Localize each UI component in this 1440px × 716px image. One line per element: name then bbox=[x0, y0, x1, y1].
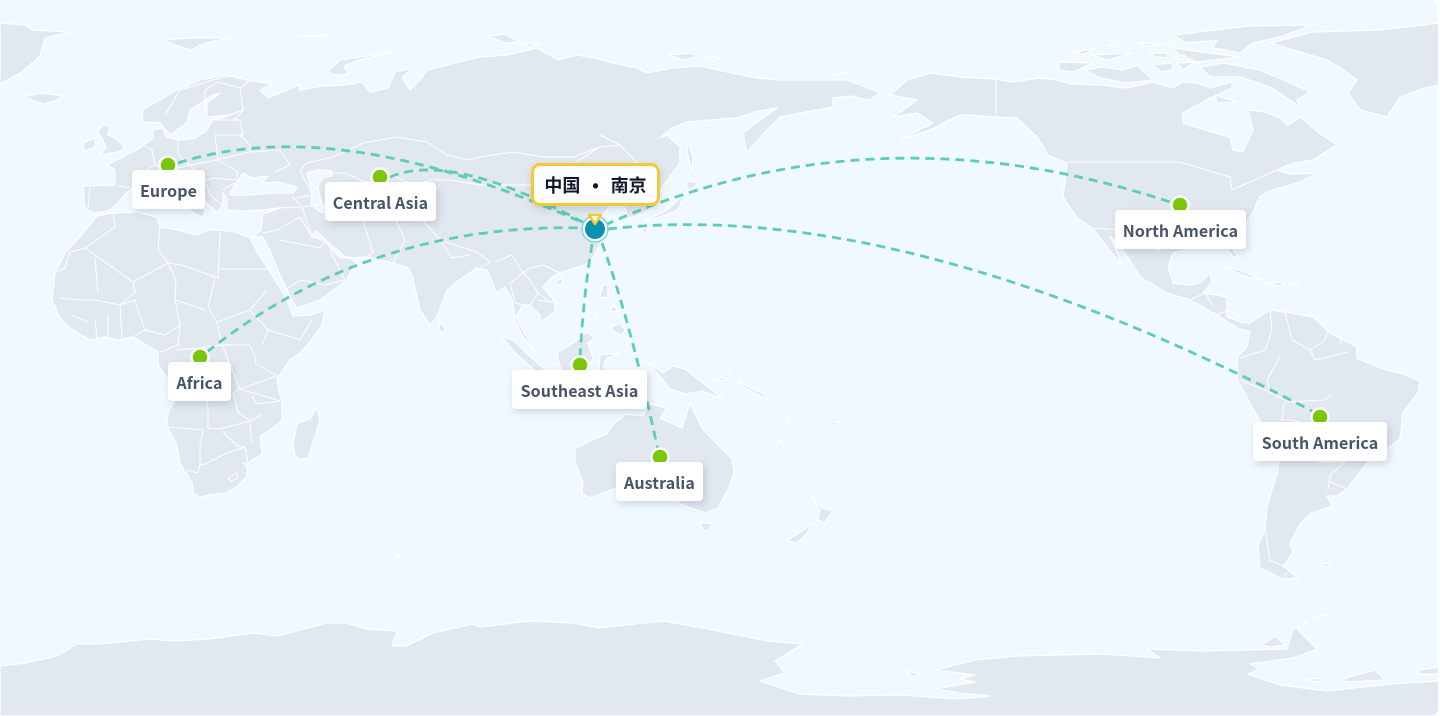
label: South America: South America bbox=[1262, 430, 1378, 454]
marker: South America bbox=[1312, 408, 1328, 426]
label: South America bbox=[1253, 422, 1387, 461]
marker: Europe bbox=[160, 156, 176, 174]
New Zealand bbox=[787, 496, 833, 543]
callout: origin city: 中国 • 南京 bbox=[544, 176, 647, 196]
New Guinea bbox=[647, 361, 723, 399]
label: Europe: Europe bbox=[140, 178, 197, 202]
route: Africa bbox=[207, 228, 585, 352]
Sri Lanka bbox=[439, 322, 445, 333]
label: Australia: Australia bbox=[624, 470, 695, 494]
Caspian Sea bbox=[307, 170, 332, 214]
label: Southeast Asia bbox=[512, 370, 647, 409]
callout: origin city bbox=[531, 163, 660, 206]
Japan bbox=[642, 142, 700, 235]
route: North America bbox=[605, 158, 1170, 225]
destination markers bbox=[160, 156, 1328, 466]
Southeast Asia islands bbox=[502, 258, 625, 405]
label: North America bbox=[1115, 210, 1246, 249]
marker: Australia bbox=[652, 448, 668, 466]
Madagascar bbox=[293, 407, 320, 459]
label: Southeast Asia: Southeast Asia bbox=[521, 378, 638, 402]
Canadian Arctic islands bbox=[1058, 25, 1312, 107]
marker: Africa bbox=[192, 348, 208, 366]
label: Australia bbox=[616, 462, 703, 501]
route: Southeast Asia bbox=[580, 244, 592, 358]
Great Britain bbox=[97, 125, 125, 155]
Alaska and North America bbox=[890, 73, 1420, 579]
country borders bbox=[55, 75, 1348, 578]
Pacific islands bbox=[395, 370, 1330, 567]
route: Central Asia bbox=[390, 170, 590, 226]
marker: Southeast Asia bbox=[572, 356, 588, 374]
Black Sea bbox=[230, 173, 297, 195]
label: North America: North America bbox=[1123, 218, 1238, 242]
Cuba and Caribbean islands bbox=[1222, 267, 1298, 287]
label: Central Asia: Central Asia bbox=[333, 190, 428, 214]
Greenland bbox=[1270, 23, 1440, 117]
label: Africa: Africa bbox=[176, 370, 223, 394]
route: South America bbox=[608, 225, 1312, 411]
label: Africa bbox=[168, 362, 231, 401]
Iceland bbox=[25, 93, 63, 104]
Svalbard bbox=[163, 38, 230, 50]
Eurasia bbox=[83, 48, 880, 352]
route: Australia bbox=[602, 243, 658, 450]
Antarctic peninsula islands bbox=[907, 636, 1440, 682]
Arctic islands bbox=[300, 34, 848, 75]
label: Central Asia bbox=[325, 182, 436, 221]
marker: Central Asia bbox=[372, 168, 388, 186]
origin marker: Nanjing bbox=[582, 216, 608, 242]
Greenland west edge bbox=[0, 23, 70, 84]
Australia bbox=[575, 403, 734, 513]
Antarctica bbox=[0, 613, 1440, 716]
Ireland bbox=[83, 138, 96, 151]
Novaya Zemlya bbox=[327, 52, 393, 75]
label: Europe bbox=[132, 170, 205, 209]
route: Europe bbox=[178, 147, 590, 226]
marker: North America bbox=[1172, 196, 1188, 214]
routes bbox=[178, 147, 1312, 450]
Tasmania bbox=[700, 522, 713, 531]
Africa bbox=[52, 212, 325, 497]
